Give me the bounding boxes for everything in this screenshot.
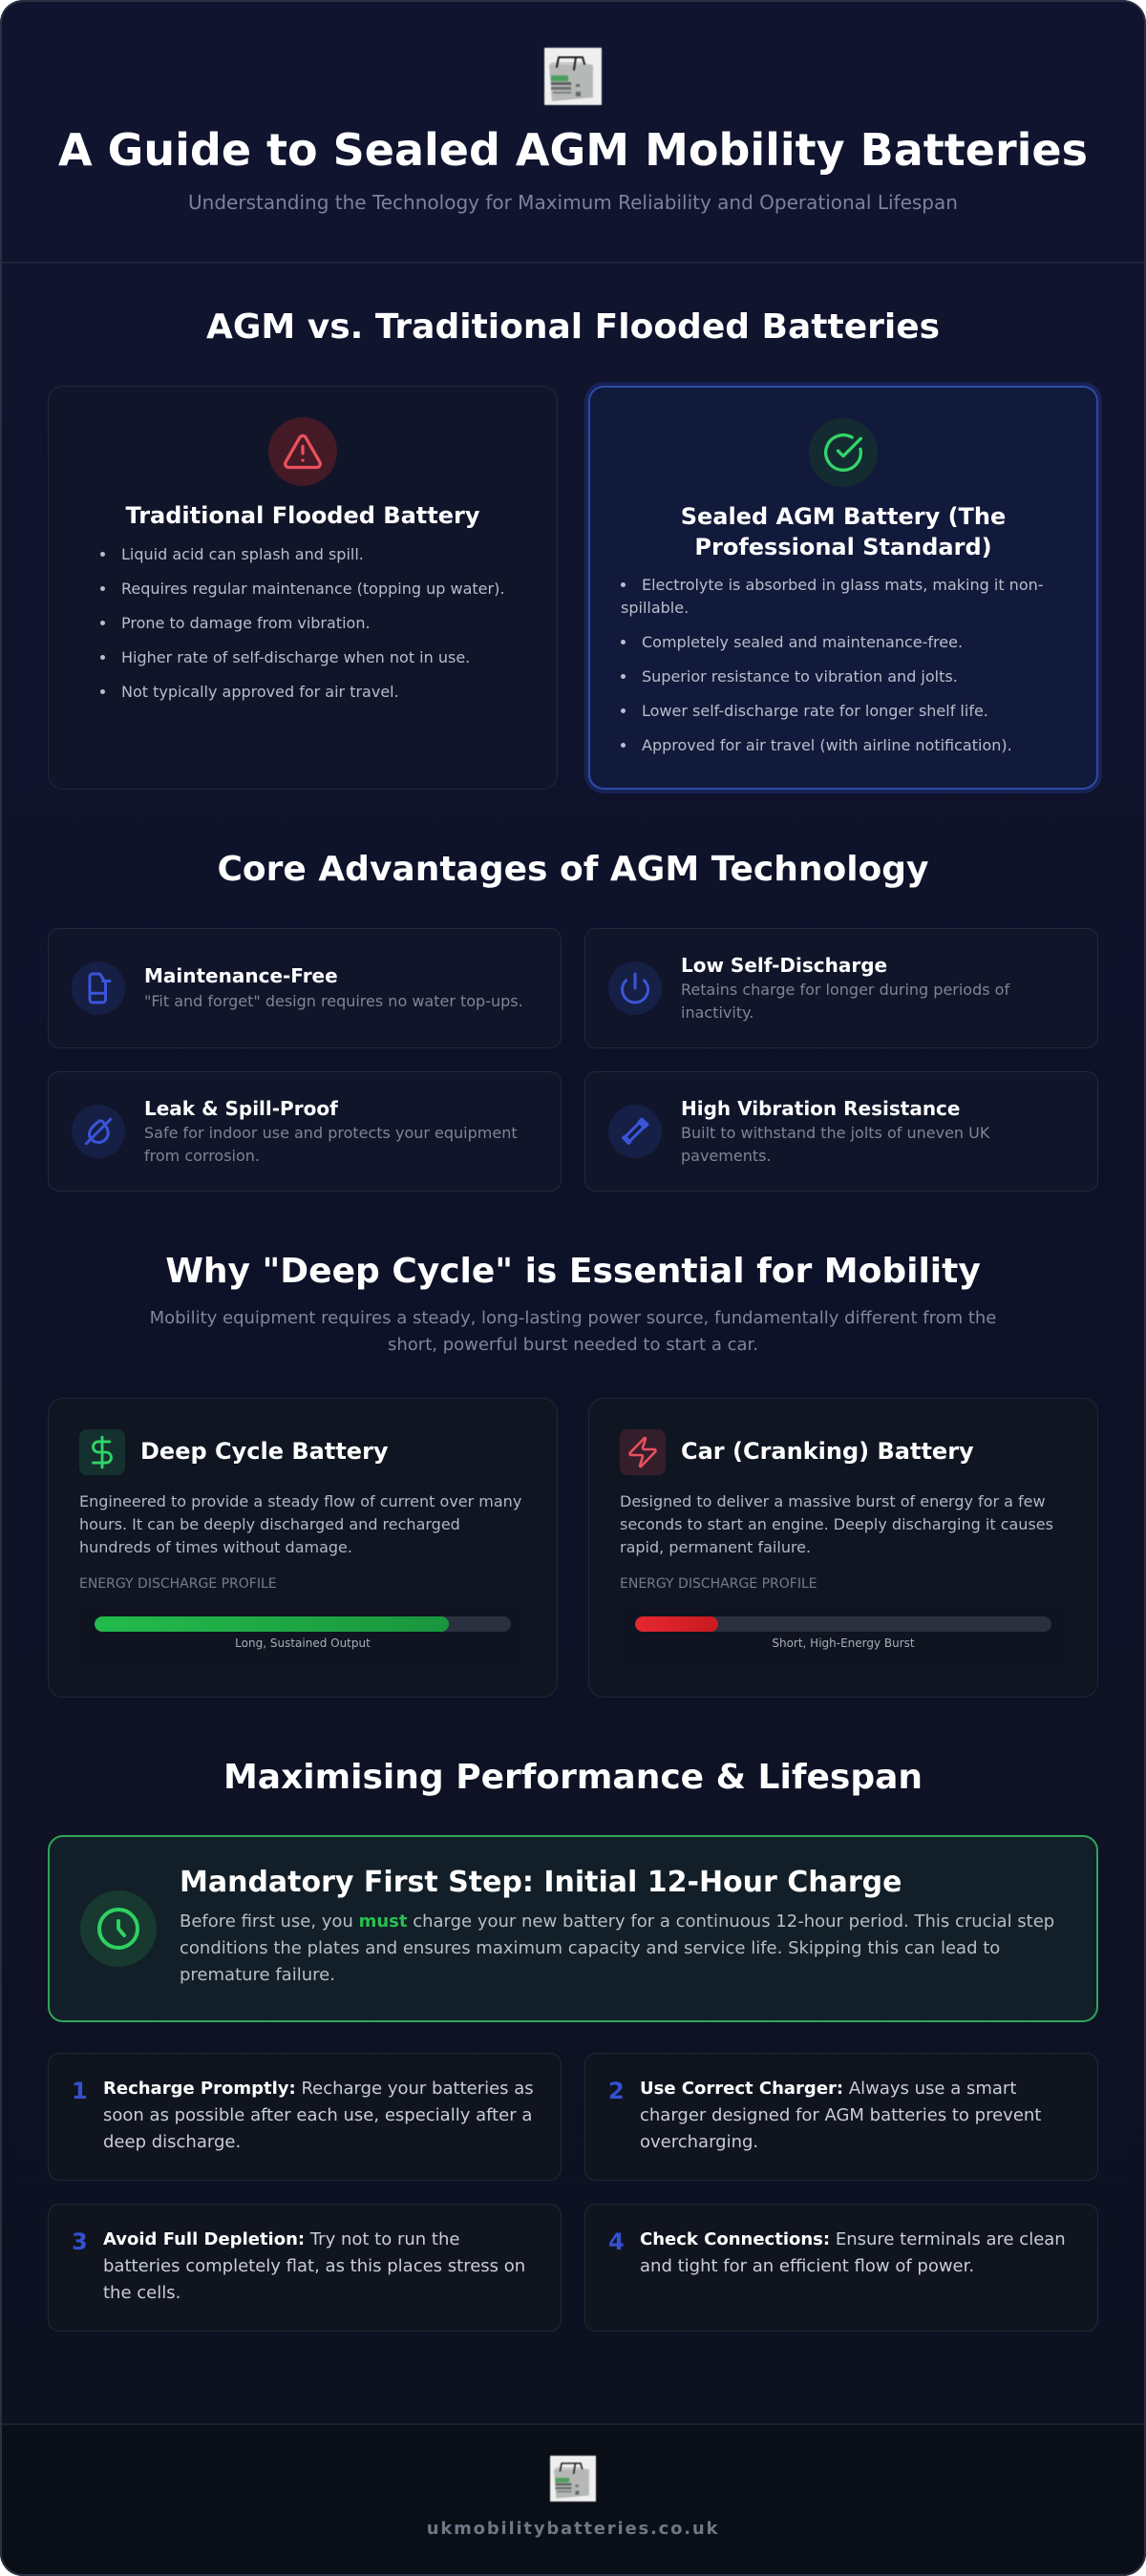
tip text: Avoid Full Depletion: Try not to run the bbox=[103, 2229, 459, 2249]
header bbox=[0, 0, 1146, 264]
list: flooded drawbacks: Higher rate of self-discharge when not in use. bbox=[121, 648, 470, 666]
number: 3 bbox=[72, 2228, 88, 2255]
feature text: High Vibration Resistance bbox=[681, 1097, 960, 1120]
tip 2 bbox=[584, 2053, 1098, 2181]
list: AGM benefits: Approved for air travel (with airline notification). bbox=[642, 736, 1012, 754]
heading: deep cycle: Why "Deep Cycle" is Essential for Mobility bbox=[165, 1252, 981, 1291]
bar chart: long sustained output: Long, Sustained Output bbox=[235, 1636, 371, 1650]
section intro bbox=[150, 1308, 996, 1355]
card heading: Deep Cycle Battery bbox=[140, 1438, 389, 1465]
chart label: ENERGY DISCHARGE PROFILE bbox=[620, 1576, 817, 1592]
tip 1 bbox=[48, 2053, 562, 2181]
card heading: Professional Standard) bbox=[694, 534, 992, 560]
tip text: charger designed for AGM batteries to prevent bbox=[640, 2105, 1041, 2125]
icon: bolt bbox=[620, 1429, 666, 1475]
card heading: Car (Cranking) Battery bbox=[681, 1438, 974, 1465]
tip text: and tight for an efficient flow of power. bbox=[640, 2256, 974, 2276]
panel: leak proof: Safe for indoor use and protects your equipment bbox=[144, 1124, 518, 1142]
description: Designed to deliver a massive burst of energy for a few bbox=[620, 1492, 1046, 1510]
number: 2 bbox=[608, 2078, 625, 2104]
tip text: soon as possible after each use, especially after a bbox=[103, 2105, 532, 2125]
icon: check bbox=[809, 418, 878, 487]
logo: battery bbox=[549, 2455, 597, 2502]
section intro: Mobility equipment requires a steady, long-lasting power source, fundamentally different from the bbox=[150, 1308, 996, 1328]
list: flooded drawbacks bbox=[100, 545, 504, 701]
list: AGM benefits: Completely sealed and maintenance-free. bbox=[642, 633, 963, 651]
description bbox=[79, 1492, 521, 1556]
feature text: Maintenance-Free bbox=[144, 964, 338, 987]
callout: initial charge bbox=[48, 1835, 1098, 2022]
description: rapid, permanent failure. bbox=[620, 1538, 811, 1556]
panel: sealed AGM battery bbox=[588, 386, 1098, 790]
description: hundreds of times without damage. bbox=[79, 1538, 352, 1556]
chart label: ENERGY DISCHARGE PROFILE bbox=[79, 1576, 277, 1592]
description: seconds to start an engine. Deeply discharging it causes bbox=[620, 1515, 1053, 1533]
icon: power bbox=[608, 961, 662, 1015]
icon: vibration bbox=[608, 1105, 662, 1158]
list: AGM benefits: Superior resistance to vibration and jolts. bbox=[642, 667, 958, 686]
callout text: conditions the plates and ensures maximum capacity and service life. Skipping this can lead to bbox=[180, 1938, 1000, 1958]
list: flooded drawbacks: Not typically approved for air travel. bbox=[121, 683, 399, 701]
icon: no drop bbox=[72, 1105, 125, 1158]
section intro: short, powerful burst needed to start a car. bbox=[388, 1335, 758, 1355]
panel: vibration: Built to withstand the jolts of uneven UK bbox=[681, 1124, 989, 1142]
list: flooded drawbacks: Requires regular maintenance (topping up water). bbox=[121, 580, 504, 598]
panel: vibration bbox=[584, 1071, 1098, 1192]
icon: clock bbox=[80, 1890, 157, 1967]
callout text: premature failure. bbox=[180, 1965, 335, 1985]
bar chart: short burst bbox=[620, 1604, 1067, 1664]
icon: warning bbox=[268, 417, 337, 486]
logo: battery bbox=[543, 47, 603, 106]
list: AGM benefits: Electrolyte is absorbed in glass mats, making it non-spillable. bbox=[621, 576, 1044, 617]
number: 1 bbox=[72, 2078, 88, 2104]
list: AGM benefits bbox=[621, 576, 1044, 754]
subtitle: Understanding the Technology for Maximum Reliability and Operational Lifespan bbox=[188, 191, 958, 214]
description: hours. It can be deeply discharged and recharged bbox=[79, 1515, 460, 1533]
panel: leak proof bbox=[48, 1071, 562, 1192]
footer bbox=[0, 2423, 1146, 2576]
tip text: Use Correct Charger: Always use a smart bbox=[640, 2079, 1016, 2099]
panel: vibration: pavements. bbox=[681, 1147, 772, 1165]
panel: car cranking battery bbox=[588, 1398, 1098, 1698]
tip text: overcharging. bbox=[640, 2132, 758, 2152]
feature text: Low Self-Discharge bbox=[681, 954, 887, 977]
card heading: Traditional Flooded Battery bbox=[125, 502, 479, 529]
tip text: the cells. bbox=[103, 2283, 180, 2303]
description bbox=[620, 1492, 1053, 1556]
list: flooded drawbacks: Liquid acid can splash and spill. bbox=[121, 545, 364, 563]
card heading: Sealed AGM Battery (The bbox=[681, 503, 1006, 530]
tip text: Check Connections: Ensure terminals are clean bbox=[640, 2229, 1066, 2249]
bar chart: long sustained output bbox=[79, 1604, 526, 1664]
panel: low self-discharge bbox=[584, 928, 1098, 1048]
icon: dollar bbox=[79, 1429, 125, 1475]
card heading bbox=[681, 503, 1006, 560]
panel: maintenance-free bbox=[48, 928, 562, 1048]
tip 3 bbox=[48, 2204, 562, 2332]
callout heading: Mandatory First Step: Initial 12-Hour Charge bbox=[180, 1866, 902, 1899]
callout text bbox=[180, 1911, 1054, 1985]
title: A Guide to Sealed AGM Mobility Batteries bbox=[58, 124, 1088, 176]
heading: performance: Maximising Performance & Lifespan bbox=[223, 1758, 923, 1797]
number: 4 bbox=[608, 2228, 625, 2255]
tip text bbox=[103, 2229, 525, 2303]
feature text: Leak & Spill-Proof bbox=[144, 1097, 338, 1120]
tip 4 bbox=[584, 2204, 1098, 2332]
panel: maintenance-free: "Fit and forget" design requires no water top-ups. bbox=[144, 992, 523, 1010]
panel: traditional flooded battery bbox=[48, 386, 558, 790]
footer url: ukmobilitybatteries.co.uk bbox=[427, 2519, 719, 2539]
panel: deep cycle battery bbox=[48, 1398, 558, 1698]
tip text bbox=[640, 2229, 1066, 2276]
panel: leak proof: from corrosion. bbox=[144, 1147, 260, 1165]
heading: core advantages: Core Advantages of AGM Technology bbox=[217, 850, 929, 889]
description: Engineered to provide a steady flow of current over many bbox=[79, 1492, 521, 1510]
tip text bbox=[640, 2079, 1041, 2152]
callout text: Before first use, you must charge your new battery for a continuous 12-hour period. This crucial step bbox=[180, 1911, 1054, 1932]
panel: low self-discharge: Retains charge for longer during periods of bbox=[681, 981, 1009, 999]
bar chart: short burst: Short, High-Energy Burst bbox=[772, 1636, 915, 1650]
tip text: deep discharge. bbox=[103, 2132, 241, 2152]
tip text bbox=[103, 2079, 534, 2152]
icon: bottle bbox=[72, 961, 125, 1015]
heading: AGM vs traditional: AGM vs. Traditional Flooded Batteries bbox=[206, 307, 940, 347]
panel: low self-discharge: inactivity. bbox=[681, 1003, 753, 1022]
list: flooded drawbacks: Prone to damage from vibration. bbox=[121, 614, 371, 632]
tip text: Recharge Promptly: Recharge your batteries as bbox=[103, 2079, 534, 2099]
list: AGM benefits: Lower self-discharge rate for longer shelf life. bbox=[642, 702, 988, 720]
tip text: batteries completely flat, as this places stress on bbox=[103, 2256, 525, 2276]
